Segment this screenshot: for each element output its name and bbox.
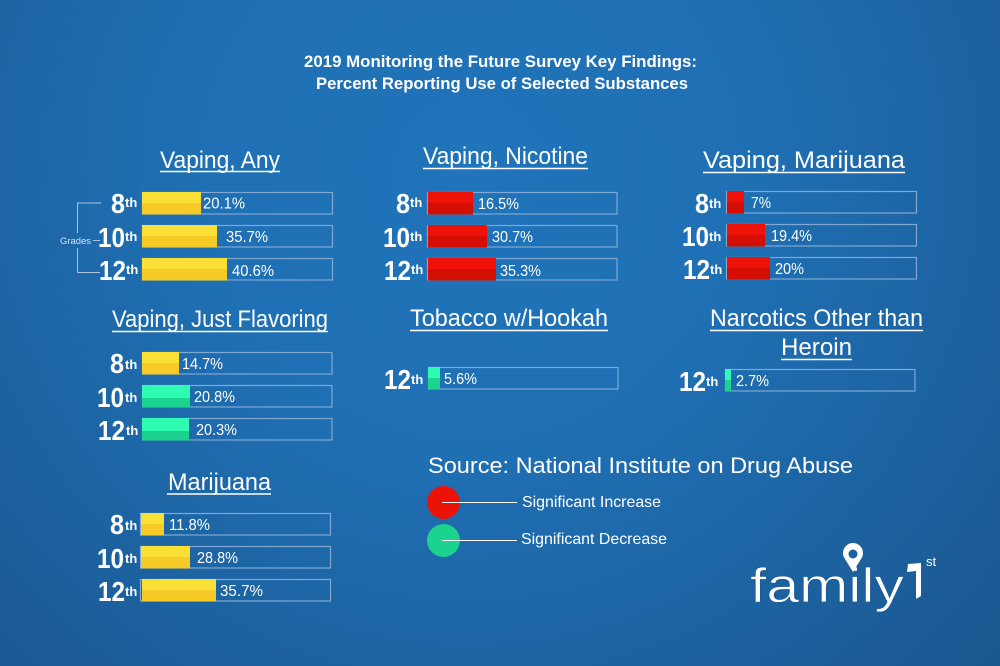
panel: Narcotics Other than Heroin (679, 305, 923, 397)
bar: 8th 16.5% (396, 188, 617, 219)
bar: 8th 16.5%: 8 (396, 188, 410, 219)
source line: Source: National Institute on Drug Abuse (428, 453, 853, 478)
bar: 12th 40.6%: th (126, 262, 138, 277)
grades bracket (60, 203, 101, 272)
bar: 8th 14.7% (110, 348, 332, 379)
title: Percent Reporting Use of Selected Substances (316, 74, 688, 93)
bar: 12th 2.7%: 12 (679, 366, 706, 397)
bar: 12th 20%: 20% (775, 261, 804, 278)
bar: 12th 20.3% (98, 415, 332, 446)
bar: 12th 35.3%: th (411, 262, 423, 277)
bar: 12th 35.7%: 35.7% (220, 583, 263, 600)
bar: 8th 20.1%: th (125, 195, 137, 210)
bar: 10th 19.4%: 10 (682, 221, 709, 252)
heading: Narcotics Other than Heroin: Narcotics Other than (710, 305, 923, 332)
bar: 10th 20.8% (97, 382, 332, 413)
bar: 12th 20.3%: 12 (98, 415, 125, 446)
bar: 10th 30.7%: 30.7% (492, 229, 533, 246)
bar: 10th 35.7%: th (125, 229, 137, 244)
legend: significant decrease: Significant Decrease (521, 531, 667, 548)
bar: 12th 35.3%: 12 (384, 255, 411, 286)
bar: 10th 28.8% (97, 543, 330, 574)
bar: 8th 14.7%: th (125, 357, 137, 372)
panel: Vaping, Just Flavoring (97, 306, 332, 446)
legend: significant increase (427, 486, 661, 519)
bar: 10th 30.7% (383, 222, 617, 253)
bar: 8th 7%: 7% (751, 195, 771, 212)
bar: 8th 20.1%: 20.1% (203, 196, 245, 212)
bar: 12th 20%: th (710, 262, 722, 277)
bar: 12th 35.3%: 35.3% (500, 263, 541, 280)
heading: Vaping, Nicotine: Vaping, Nicotine (423, 143, 588, 170)
bar: 10th 20.8%: th (125, 390, 137, 405)
heading: Vaping, Just Flavoring: Vaping, Just Flavoring (112, 306, 328, 333)
bar: 10th 28.8%: 10 (97, 543, 124, 574)
bar: 12th 5.6% (384, 364, 618, 395)
bar: 10th 30.7%: 10 (383, 222, 410, 253)
bar: 12th 20.3%: th (126, 423, 138, 438)
panel: Tobacco w/Hookah (384, 305, 618, 395)
bar: 10th 20.8%: 20.8% (194, 389, 235, 406)
panel: Vaping, Any (60, 147, 332, 286)
heading: Narcotics Other than Heroin: Heroin (781, 334, 852, 361)
panel: Marijuana (97, 469, 330, 607)
bar: 12th 20.3%: 20.3% (196, 422, 237, 439)
icon: location pin (843, 543, 863, 572)
bar: 8th 16.5%: th (410, 195, 422, 210)
bar: 12th 40.6%: 12 (99, 255, 126, 286)
bar: 8th 16.5%: 16.5% (478, 196, 519, 213)
bar: 8th 7%: th (709, 196, 721, 211)
bar: 10th 35.7%: 10 (98, 222, 125, 253)
logo: family 1st (750, 543, 936, 613)
bar: 12th 2.7%: th (706, 374, 718, 389)
bar: 10th 30.7%: th (410, 229, 422, 244)
bar: 10th 35.7% (98, 222, 332, 253)
heading: Tobacco w/Hookah: Tobacco w/Hookah (410, 305, 608, 332)
heading: Narcotics Other than Heroin (710, 305, 923, 361)
bar: 10th 19.4% (682, 221, 916, 252)
bar: 12th 5.6%: th (411, 372, 423, 387)
heading: Marijuana: Marijuana (168, 469, 272, 496)
heading: Vaping, Any: Vaping, Any (160, 147, 280, 174)
bar: 10th 19.4%: 19.4% (771, 228, 812, 245)
bar: 8th 20.1% (111, 188, 332, 219)
bar: 10th 28.8%: th (125, 551, 137, 566)
bar: 8th 7%: 8 (695, 188, 709, 219)
bar: 12th 5.6%: 5.6% (444, 371, 477, 388)
bar: 12th 35.7%: 12 (98, 576, 125, 607)
bar: 8th 11.8%: th (125, 518, 137, 533)
bar: 12th 5.6%: 12 (384, 364, 411, 395)
bar: 10th 35.7%: 35.7% (226, 229, 268, 246)
bar: 12th 40.6% (99, 255, 332, 286)
bar: 8th 20.1%: 8 (111, 188, 125, 219)
bar: 8th 11.8%: 11.8% (169, 517, 210, 534)
title: 2019 Monitoring the Future Survey Key Findings: (304, 52, 697, 71)
bar: 12th 35.3% (384, 255, 617, 286)
legend: significant decrease (427, 524, 667, 557)
logo: family 1st: family (750, 560, 904, 613)
bar: 8th 11.8%: 8 (110, 509, 124, 540)
panel: Vaping, Marijuana (682, 147, 916, 285)
bar: 10th 28.8%: 28.8% (197, 550, 238, 567)
bar: 10th 19.4%: th (709, 229, 721, 244)
bar: 12th 20%: 12 (683, 254, 710, 285)
bar: 12th 35.7%: th (125, 584, 137, 599)
bar: 12th 2.7% (679, 366, 915, 397)
heading: Vaping, Marijuana: Vaping, Marijuana (703, 147, 906, 174)
bar: 8th 14.7%: 14.7% (182, 356, 223, 373)
logo: family 1st: st (926, 554, 936, 569)
bar: 8th 7% (695, 188, 916, 219)
panel: Vaping, Nicotine (383, 143, 617, 286)
bar: 12th 40.6%: 40.6% (232, 263, 274, 280)
bar: 8th 11.8% (110, 509, 330, 540)
bar: 12th 35.7% (98, 576, 330, 607)
title (304, 52, 697, 93)
bar: 10th 20.8%: 10 (97, 382, 124, 413)
legend: significant increase: Significant Increase (522, 494, 661, 511)
bar: 8th 14.7%: 8 (110, 348, 124, 379)
grades bracket: Grades (60, 236, 91, 247)
bar: 12th 2.7%: 2.7% (736, 373, 769, 390)
bar: 12th 20% (683, 254, 916, 285)
